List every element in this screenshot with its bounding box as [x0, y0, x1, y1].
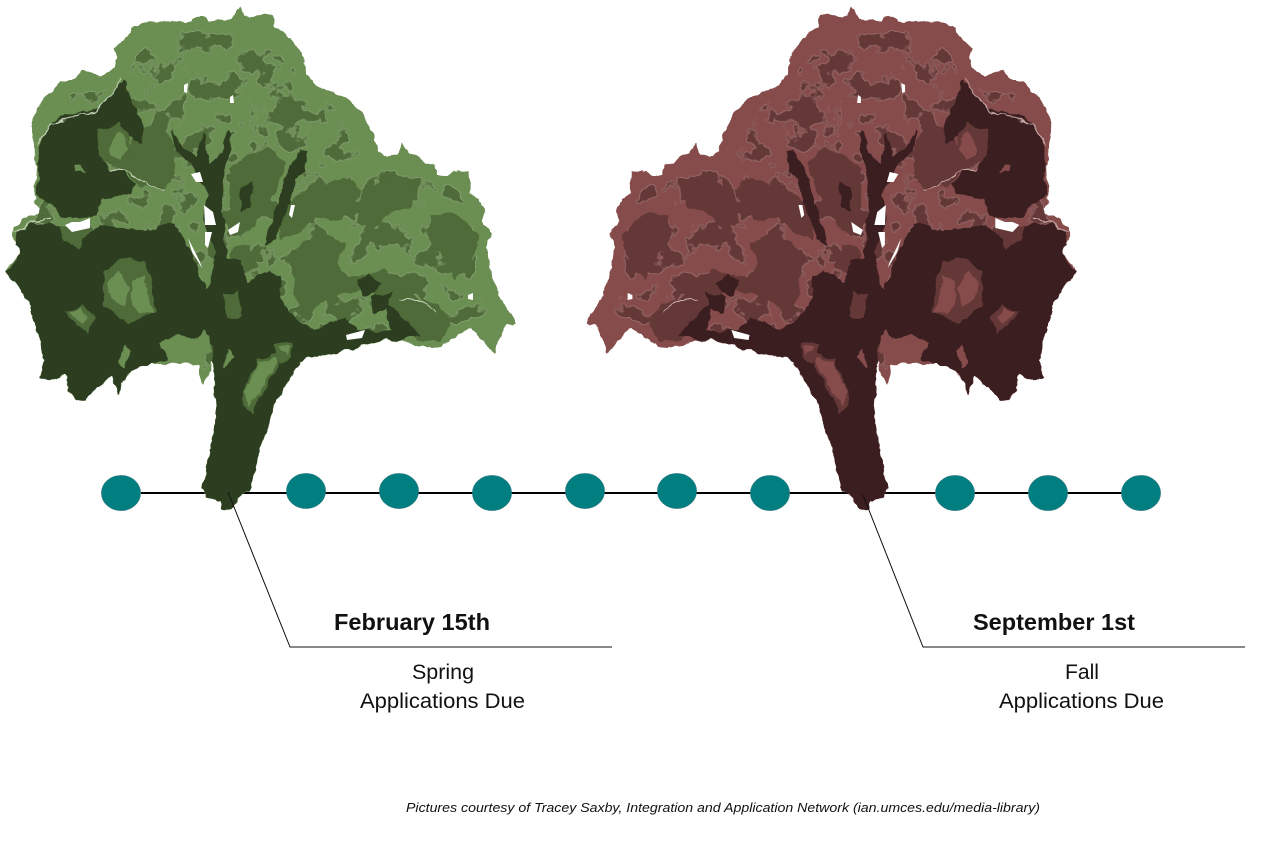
callout leader: fall — [863, 495, 1245, 647]
spring deadline text: Applications Due — [360, 690, 525, 713]
fall deadline text: Fall — [1065, 661, 1099, 684]
spring deadline text — [334, 609, 525, 713]
spring deadline text: Spring — [412, 661, 474, 684]
fall deadline text — [973, 609, 1164, 713]
fall deadline text: September 1st — [973, 609, 1135, 635]
icon: green spring tree — [8, 8, 515, 508]
spring deadline text: February 15th — [334, 609, 490, 635]
callout leader: spring — [228, 492, 612, 647]
icon: red fall tree — [587, 8, 1074, 508]
fall deadline text: Applications Due — [999, 690, 1164, 713]
image credit: Pictures courtesy of Tracey Saxby, Integration and Application Network (ian.umces.edu/media-library) — [406, 800, 1040, 815]
timeline line — [141, 492, 1141, 494]
timeline dots — [102, 474, 1160, 510]
